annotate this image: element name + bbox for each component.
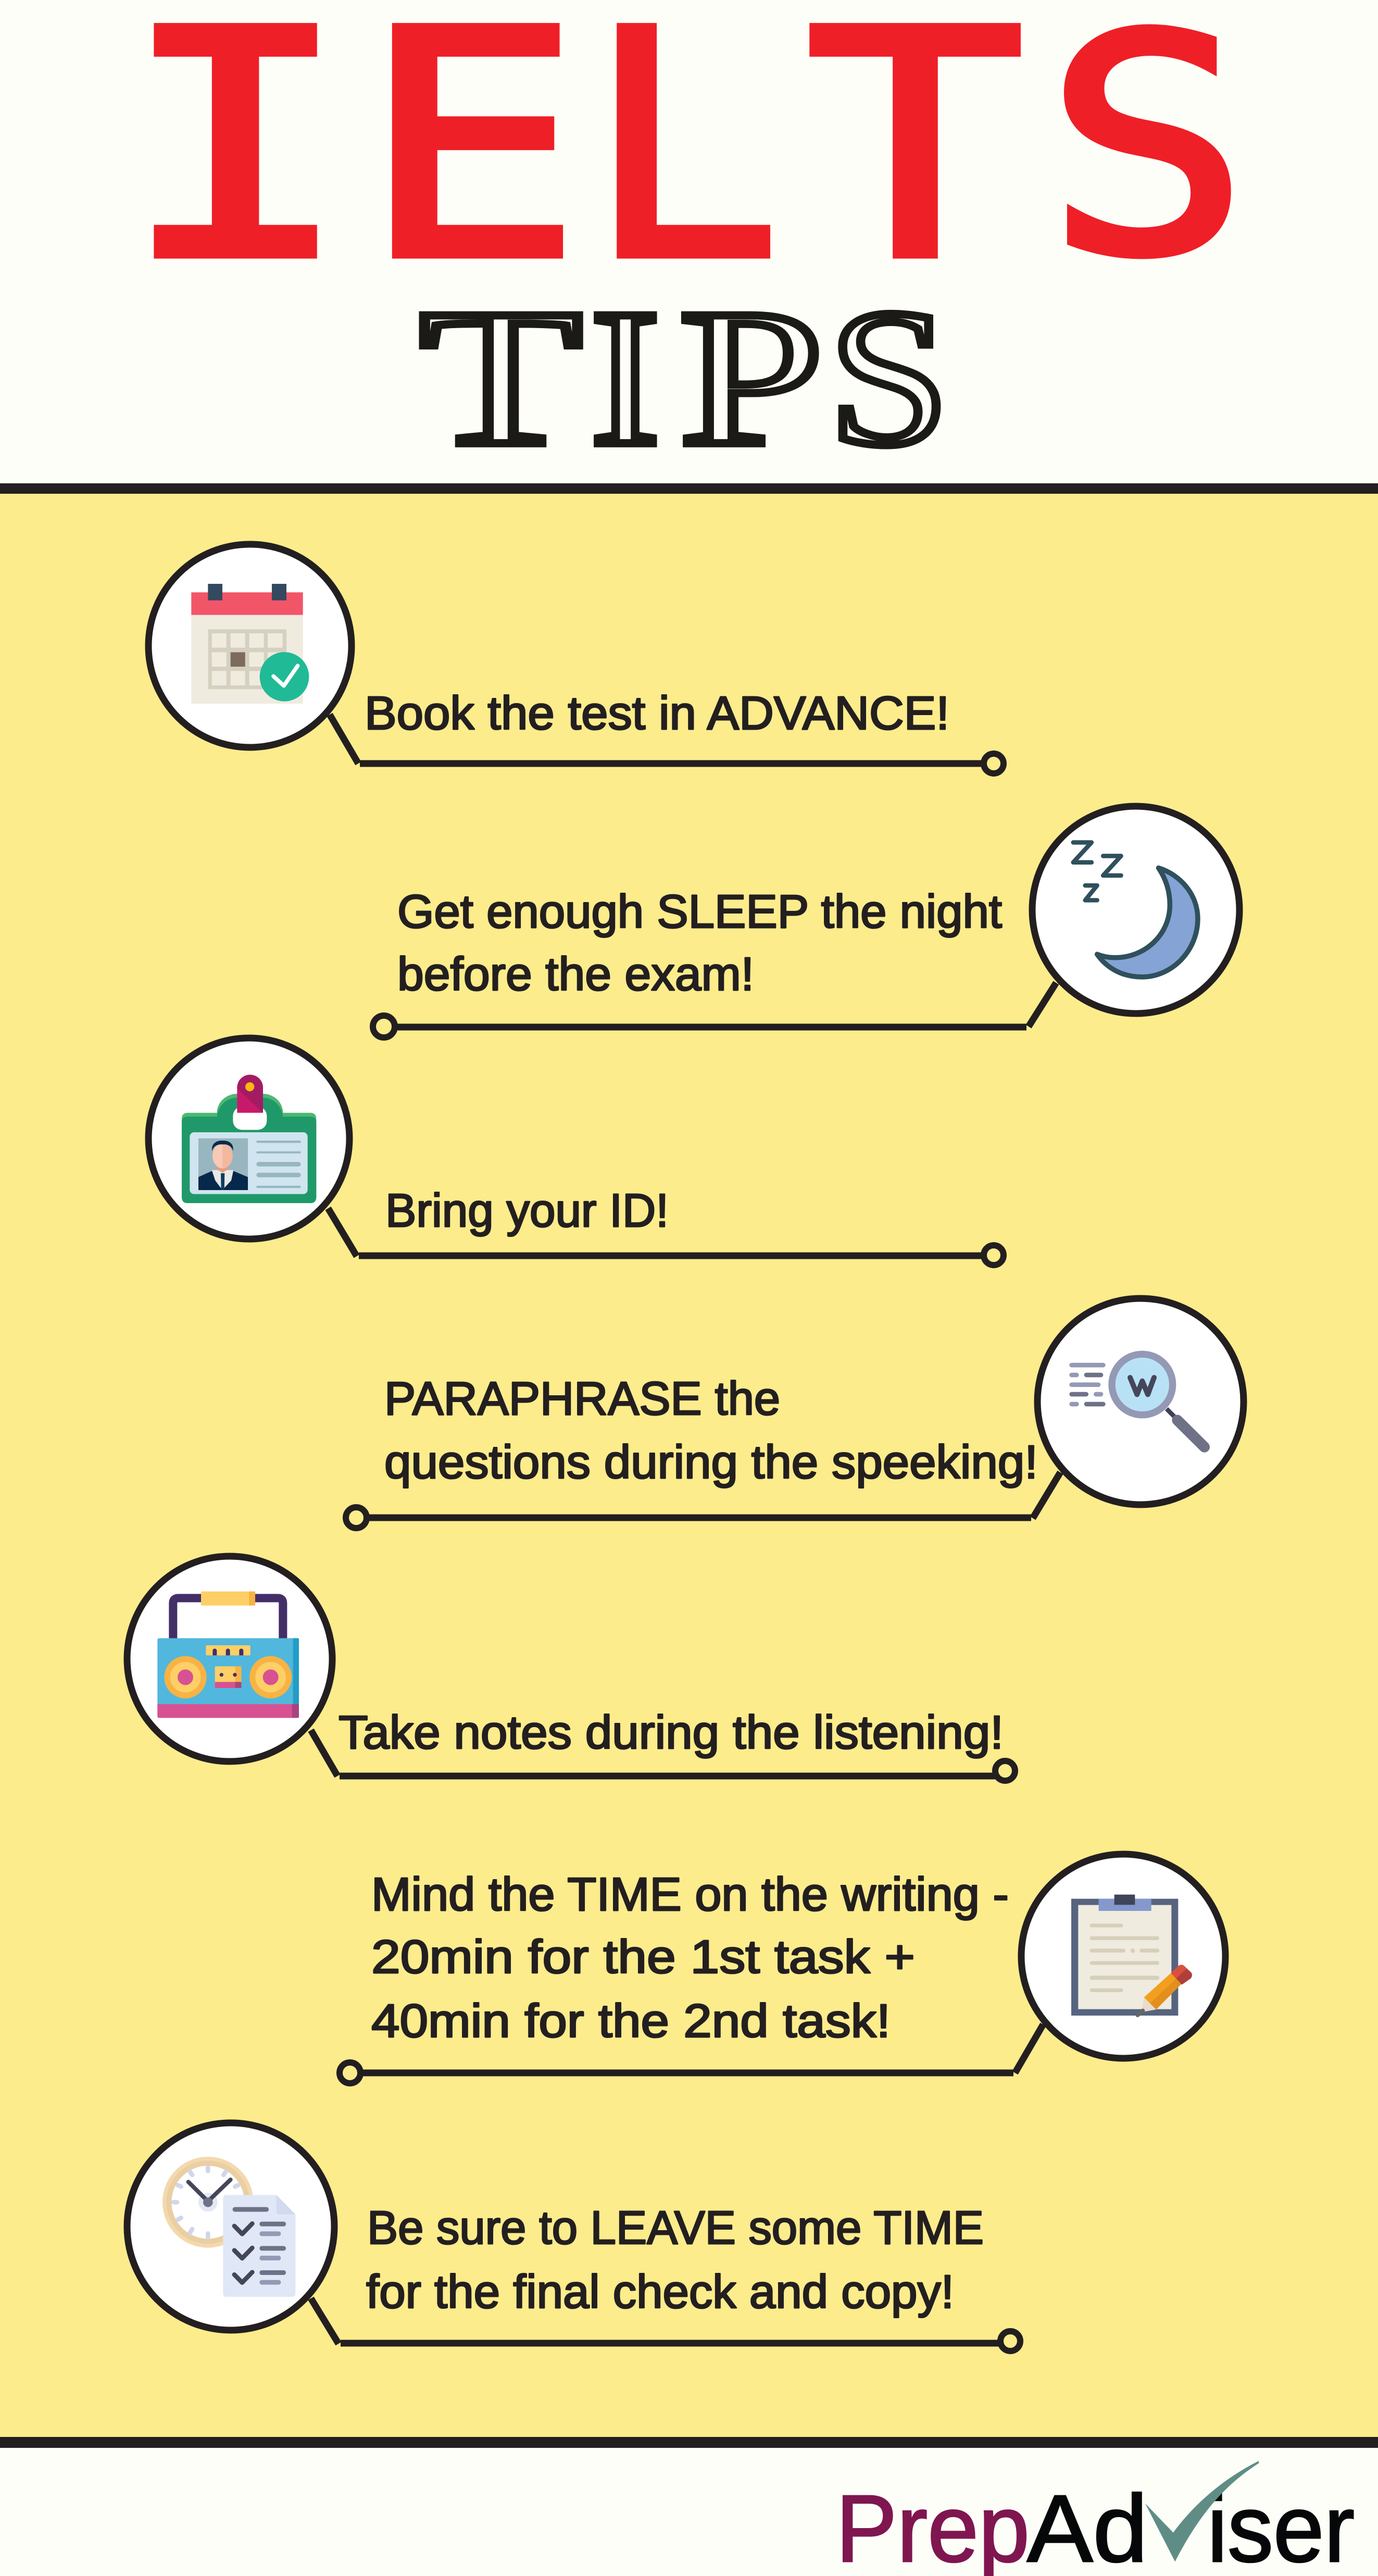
panel: tip 6 writing time [340, 1854, 1225, 2083]
text: tip 2: Get enough SLEEP the night [397, 886, 1002, 938]
panel: tip 2 sleep [373, 806, 1239, 1037]
icon: moon [1073, 842, 1198, 977]
text: tip 6: Mind the TIME on the writing - [371, 1869, 1009, 1921]
text: tip 6 [371, 1869, 1009, 2047]
heading: TIPS: T [420, 269, 582, 485]
text: tip 6: 40min for the 2nd task! [371, 1995, 891, 2047]
title: IELTS [121, 0, 1249, 329]
icon: check mark V [1145, 2461, 1259, 2561]
text: tip 7: for the final check and copy! [366, 2266, 954, 2318]
text: tip 4: PARAPHRASE the [384, 1373, 780, 1425]
text: tip 4 [384, 1373, 1038, 1489]
icon: boombox [157, 1592, 299, 1718]
panel: tip 4 paraphrase [346, 1298, 1244, 1528]
icon: clipboard and pencil [1071, 1895, 1192, 2016]
text: tip 2: before the exam! [397, 948, 754, 1001]
icon: calendar [191, 584, 309, 704]
icon: ID badge [182, 1074, 316, 1203]
text: tip 5: Take notes during the listening! [339, 1707, 1004, 1759]
panel: tip 7 final check [127, 2123, 1020, 2351]
panel: tip 3 ID [148, 1038, 1004, 1265]
text: tip 3: Bring your ID! [385, 1185, 669, 1237]
text: tip 6: 20min for the 1st task + [371, 1931, 915, 1983]
text: tip 7: Be sure to LEAVE some TIME [367, 2202, 984, 2254]
logo: PrepAdviser [836, 2461, 1355, 2576]
heading: TIPS: P [679, 269, 824, 485]
panel: tip 1 book the test [148, 544, 1004, 773]
icon: clock and checklist [162, 2157, 295, 2297]
text: tip 1: Book the test in ADVANCE! [365, 687, 949, 740]
icon: magnifying glass over text [1069, 1350, 1205, 1447]
panel: yellow tips background [0, 490, 1378, 2440]
panel: tip 5 listening [127, 1556, 1015, 1781]
text: tip 4: questions during the speeking! [384, 1436, 1038, 1489]
heading: TIPS: I [591, 269, 660, 485]
heading: TIPS [420, 269, 950, 486]
heading: TIPS: S [828, 270, 950, 486]
text: tip 2 [397, 886, 1002, 1001]
text: tip 7 [366, 2202, 984, 2318]
